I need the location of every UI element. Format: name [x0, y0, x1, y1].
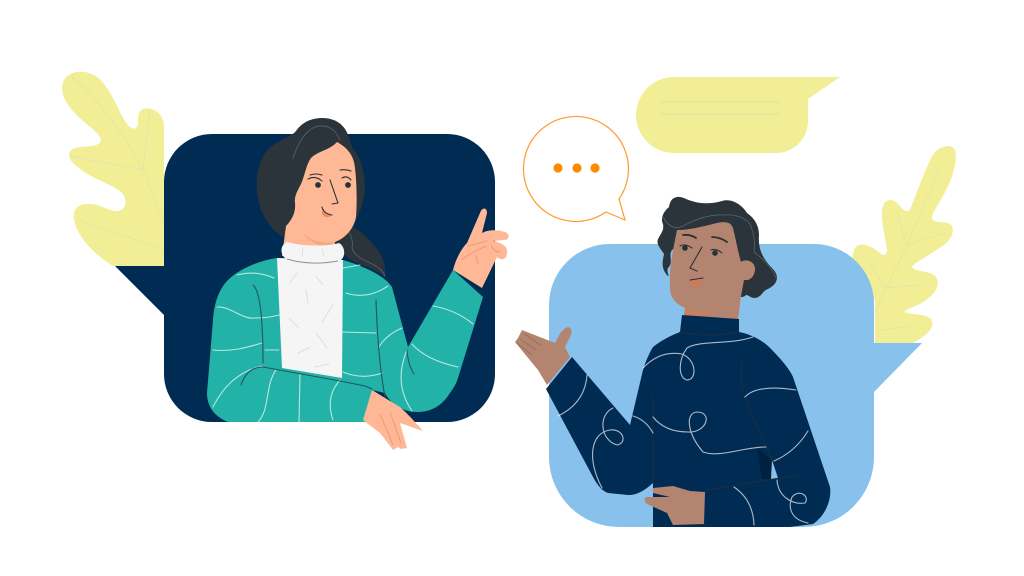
panel: right blue speech bubble	[549, 244, 922, 527]
woman face and neck	[282, 142, 357, 256]
man sweater pattern lines	[558, 337, 808, 525]
callout: yellow speech bubble	[636, 77, 840, 153]
woman white shirt	[277, 258, 343, 378]
woman raised hand	[453, 208, 509, 288]
woman cardigan pattern lines	[213, 265, 473, 422]
man face and neck	[670, 222, 755, 320]
figure: man in navy sweater	[515, 197, 830, 527]
man left hand	[515, 327, 572, 385]
man lower hand	[645, 486, 705, 525]
woman turtleneck collar	[281, 242, 344, 263]
icon: right leaf	[853, 146, 956, 344]
panel: left navy speech bubble	[115, 134, 495, 422]
man hair	[657, 197, 777, 298]
woman cardigan	[207, 258, 483, 422]
woman lower hand	[363, 390, 423, 450]
callout: orange outlined thought bubble with dots	[523, 116, 628, 221]
man sweater	[546, 315, 830, 527]
woman hair	[257, 118, 385, 278]
icon: left leaf	[62, 72, 164, 266]
figure: woman in teal cardigan	[207, 118, 509, 450]
